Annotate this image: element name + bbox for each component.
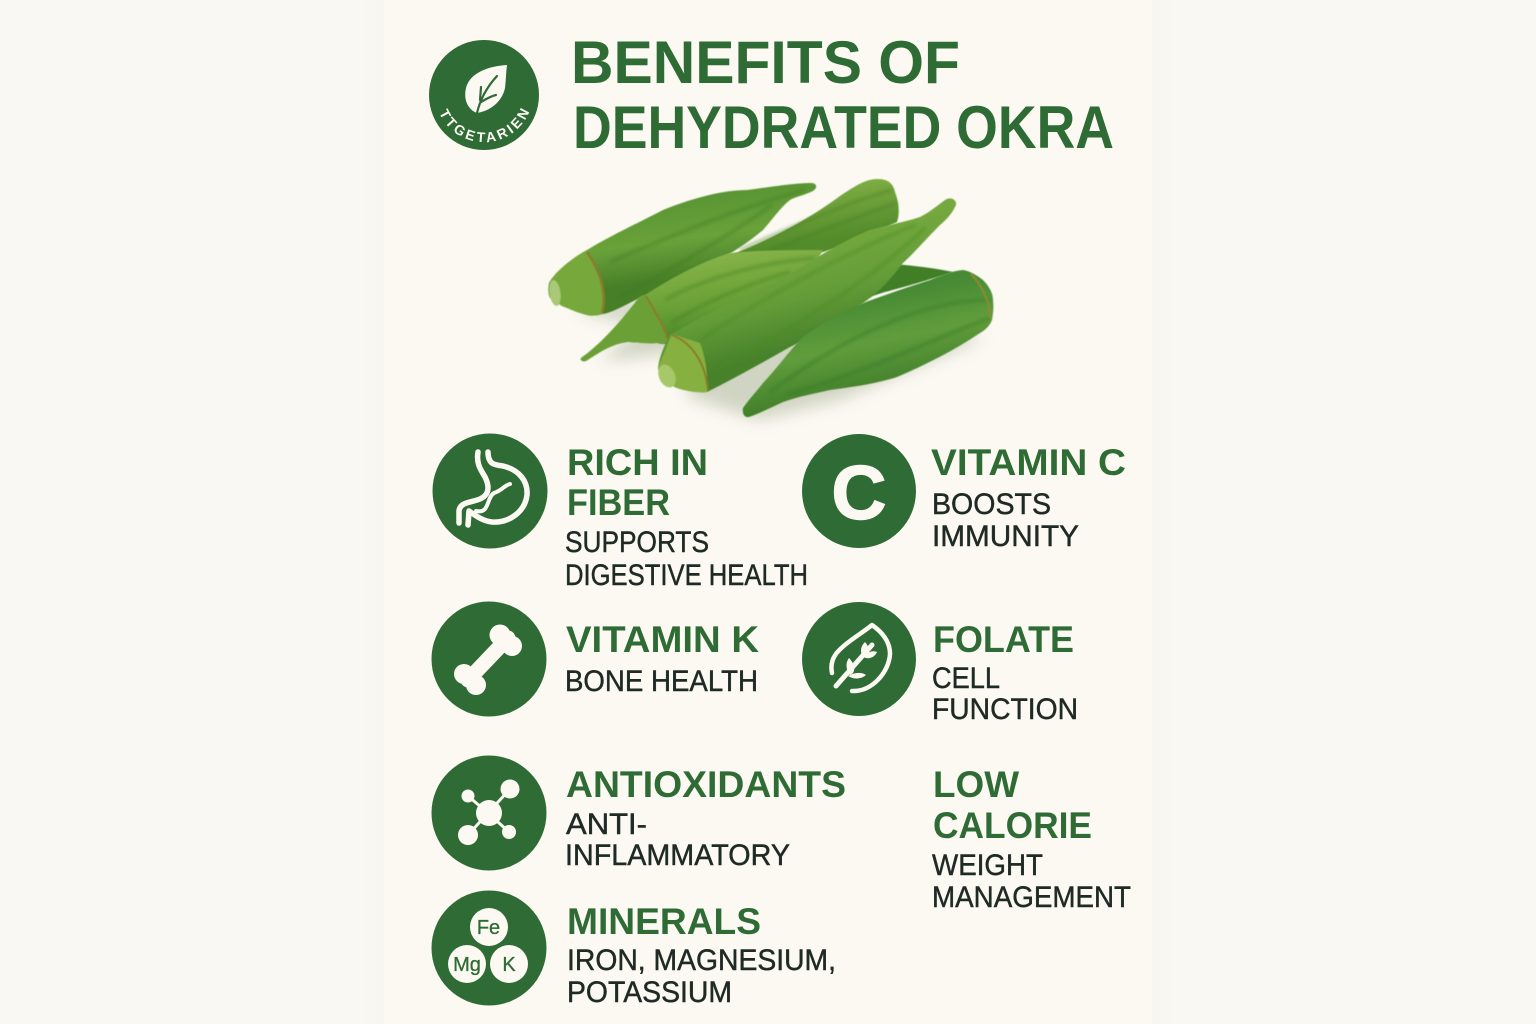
icon: minerals xyxy=(432,890,546,1006)
okra pod tail xyxy=(860,264,953,300)
okra pod back right xyxy=(715,179,899,261)
text: cell function: CELL xyxy=(932,662,1000,695)
icon: vitamin C xyxy=(802,434,916,548)
heading: low calorie xyxy=(932,764,1131,914)
heading: vitamin C xyxy=(931,442,1126,553)
text: iron magnesium potassium: POTASSIUM xyxy=(567,976,732,1009)
heading: rich in fiber: FIBER xyxy=(567,482,670,523)
heading: vitamin K xyxy=(565,619,759,698)
text: cell function: FUNCTION xyxy=(932,693,1078,726)
icon: minerals: Fe xyxy=(477,917,500,939)
icon: stomach xyxy=(432,434,548,548)
heading: minerals: MINERALS xyxy=(567,901,761,942)
text: supports digestive health: SUPPORTS xyxy=(565,526,709,559)
text: bone health: BONE HEALTH xyxy=(565,665,758,698)
text: iron magnesium potassium xyxy=(567,944,836,1009)
heading: antioxidants xyxy=(565,764,846,872)
icon: bone xyxy=(432,602,546,716)
text: boosts immunity: IMMUNITY xyxy=(932,520,1079,553)
text: anti-inflammatory: INFLAMMATORY xyxy=(565,839,790,872)
icon: folate leaf xyxy=(802,602,916,716)
heading: folate: FOLATE xyxy=(933,619,1074,660)
text: boosts immunity xyxy=(932,488,1079,553)
text: supports digestive health xyxy=(565,526,808,592)
text: supports digestive health: DIGESTIVE HEALTH xyxy=(565,559,808,592)
title: DEHYDRATED OKRA xyxy=(573,94,1114,161)
icon: vegetarian leaf badge xyxy=(429,40,539,150)
heading: low calorie: CALORIE xyxy=(933,805,1092,846)
text: anti-inflammatory: ANTI- xyxy=(566,808,647,841)
text: anti-inflammatory xyxy=(565,808,790,872)
heading: minerals xyxy=(567,901,836,1009)
icon: vitamin C: C xyxy=(832,451,886,536)
text: weight management: MANAGEMENT xyxy=(932,881,1131,914)
heading: vitamin C: VITAMIN C xyxy=(931,442,1126,483)
heading: folate xyxy=(932,619,1078,726)
badge text: TTGETARIEN xyxy=(440,108,530,142)
text: weight management: WEIGHT xyxy=(932,849,1043,882)
heading: low calorie: LOW xyxy=(933,764,1019,805)
icon: minerals: K xyxy=(502,954,516,976)
heading: rich in fiber xyxy=(565,442,808,592)
illustration: okra pods xyxy=(548,179,993,420)
heading: rich in fiber: RICH IN xyxy=(567,442,708,483)
title: BENEFITS OF xyxy=(571,29,960,96)
okra pod middle xyxy=(581,250,823,361)
text: cell function xyxy=(932,662,1078,726)
heading: antioxidants: ANTIOXIDANTS xyxy=(566,764,846,805)
okra pod front right xyxy=(743,270,993,417)
text: weight management xyxy=(932,849,1131,914)
title xyxy=(571,29,1114,161)
okra pod back left xyxy=(548,183,816,316)
icon: minerals: Mg xyxy=(453,954,481,976)
okra pod front centre xyxy=(655,198,956,392)
text: boosts immunity: BOOSTS xyxy=(932,488,1051,521)
icon: antioxidant molecule xyxy=(432,756,546,870)
heading: vitamin K: VITAMIN K xyxy=(566,619,759,660)
text: iron magnesium potassium: IRON, MAGNESIUM, xyxy=(567,944,836,977)
